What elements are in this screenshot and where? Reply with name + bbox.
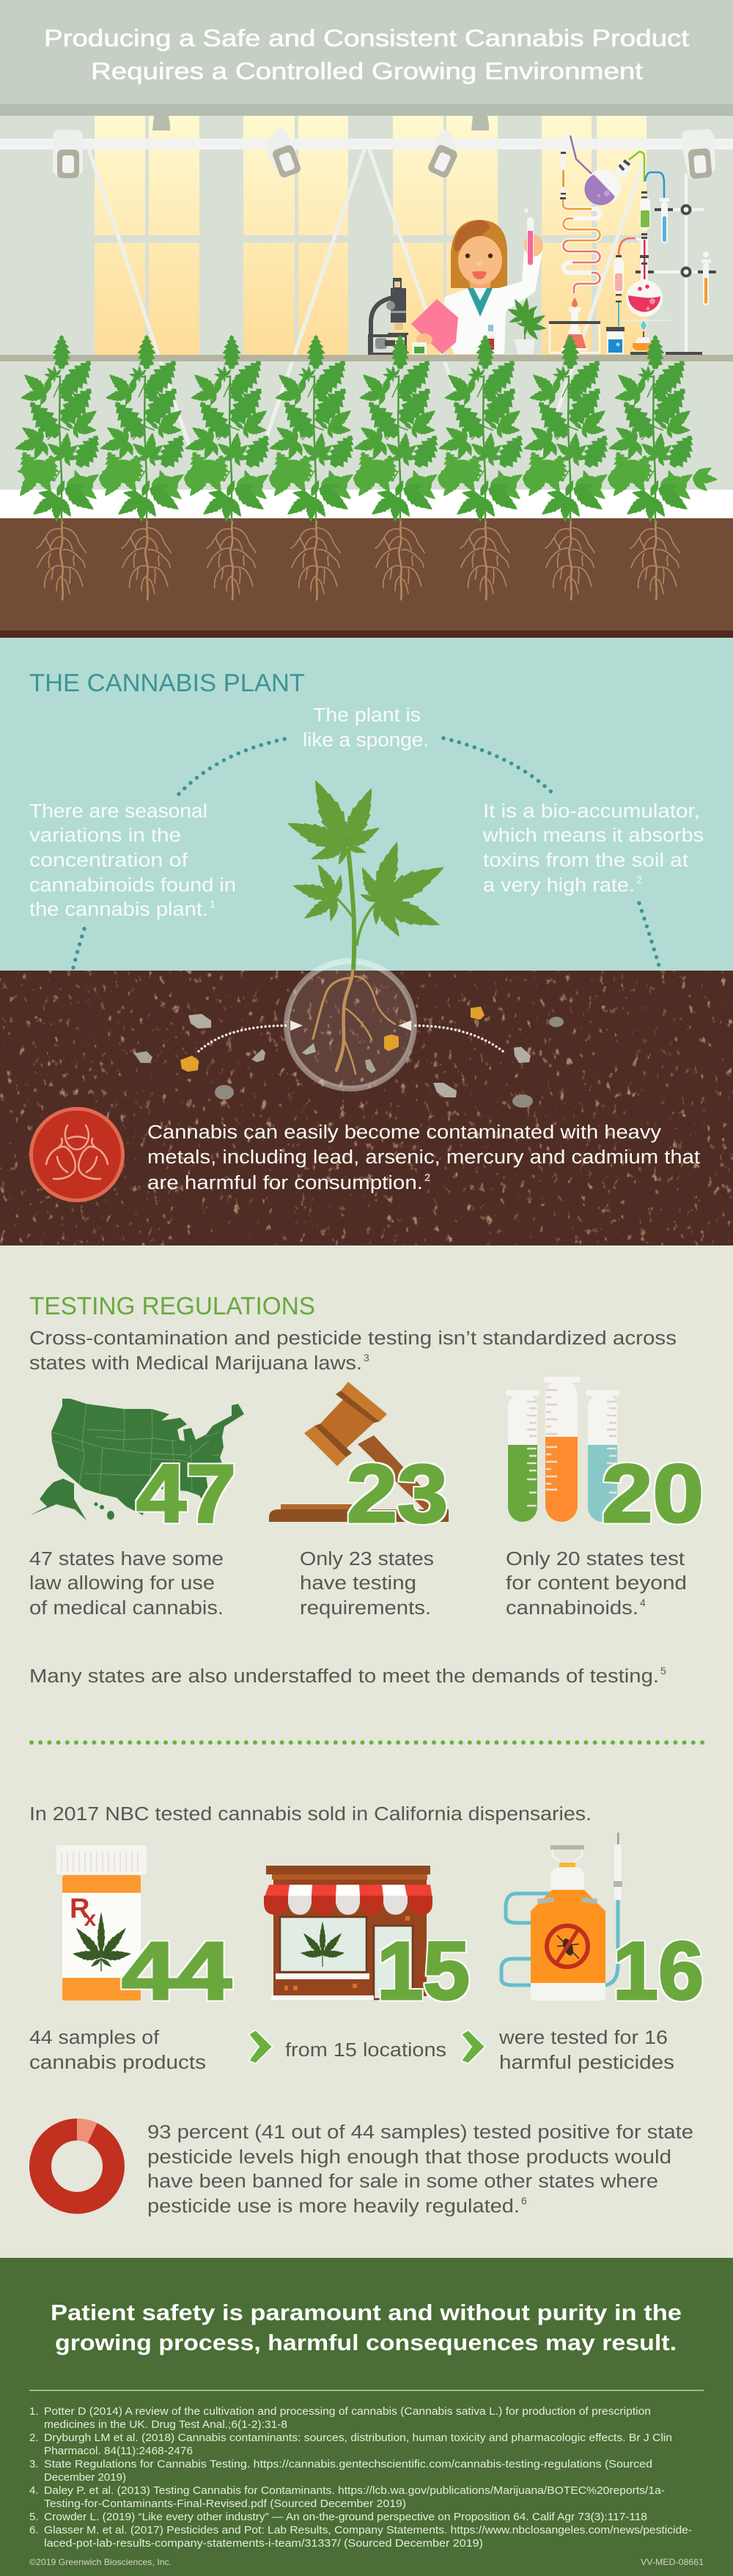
green beaker bbox=[412, 342, 427, 354]
potted seedling bbox=[500, 290, 554, 354]
references: Potter D (2014) A review of the cultivation and processing of cannabis (Cannabis sativa L.) for production of prescription bbox=[44, 2405, 651, 2418]
text: 93 percent: pesticide use is more heavily regulated. bbox=[147, 2196, 520, 2217]
intro text bbox=[29, 1328, 677, 1374]
u tube and purple flask bbox=[560, 136, 644, 205]
references: 4. bbox=[29, 2484, 39, 2497]
document code: VV-MED-08661 bbox=[641, 2557, 704, 2567]
panel: conclusion and references bbox=[0, 2258, 733, 2576]
scientist bbox=[411, 208, 544, 354]
orange tube bbox=[701, 251, 711, 306]
small bottle bbox=[486, 325, 496, 354]
references: 2. bbox=[29, 2432, 39, 2444]
icon: prescription bottle: x bbox=[84, 1907, 96, 1931]
caption: 44 samples: 44 samples of bbox=[29, 2028, 160, 2048]
callout: heavy metals: Cannabis can easily become contaminated with heavy bbox=[147, 1122, 661, 1143]
row of cannabis plants bbox=[13, 335, 718, 522]
references: December 2019) bbox=[44, 2471, 126, 2484]
icon: prescription bottle: R bbox=[70, 1894, 89, 1924]
blue jar bbox=[606, 302, 625, 354]
callout: heavy metals: 2 bbox=[424, 1171, 430, 1183]
arrow: chevron two bbox=[461, 2030, 485, 2064]
icon: pesticide sprayer bbox=[501, 1833, 622, 2001]
text: sponge: The plant is bbox=[313, 705, 421, 726]
caption: 23 states bbox=[300, 1549, 434, 1619]
text: sponge bbox=[303, 705, 429, 751]
references: 3. bbox=[29, 2458, 39, 2470]
references: laced-pot-lab-results-company-statements-i-team/31337/ (Sourced December 2019) bbox=[44, 2537, 483, 2550]
conclusion: growing process, harmful consequences may result. bbox=[55, 2330, 677, 2355]
number: 47: 47 bbox=[136, 1448, 236, 1539]
references: 6. bbox=[29, 2524, 39, 2536]
caption: 20 states: 4 bbox=[640, 1597, 646, 1608]
caption: 16 pesticides: harmful pesticides bbox=[499, 2053, 674, 2073]
text: seasonal variations: cannabinoids found in bbox=[29, 875, 236, 896]
text: seasonal variations: variations in the bbox=[29, 825, 181, 846]
clipboard folder bbox=[411, 299, 458, 354]
pink tube bbox=[614, 238, 643, 302]
number: 44: 44 bbox=[122, 1925, 232, 2017]
text: 93 percent: pesticide levels high enough that those products would bbox=[147, 2147, 671, 2168]
illustration: seedling roots bbox=[313, 971, 395, 1074]
text: bio-accumulator: toxins from the soil at bbox=[483, 850, 688, 871]
icon: dispensary storefront bbox=[264, 1866, 432, 2000]
number: 20: 20 bbox=[602, 1448, 704, 1539]
text: bio-accumulator: It is a bio-accumulator, bbox=[483, 801, 700, 822]
panel: contaminated soil bbox=[0, 971, 733, 1245]
text: 93 percent: 6 bbox=[521, 2195, 527, 2207]
caption: 47 states: of medical cannabis. bbox=[29, 1598, 224, 1619]
caption: 23 states: Only 23 states bbox=[300, 1549, 434, 1569]
caption: 20 states: Only 20 states test bbox=[506, 1549, 685, 1569]
blue tube bbox=[645, 172, 669, 243]
lab apparatus bbox=[549, 136, 716, 355]
icon: prescription bottle bbox=[56, 1845, 147, 2001]
references: Daley P. et al. (2013) Testing Cannabis for Contaminants. https://lcb.wa.gov/publications/Marijuana/BOTEC%20reports/1a- bbox=[44, 2484, 665, 2497]
text: seasonal variations: the cannabis plant. bbox=[29, 899, 208, 920]
conclusion: Patient safety is paramount and without purity in the bbox=[51, 2300, 682, 2325]
caption: 47 states: law allowing for use bbox=[29, 1573, 215, 1594]
title: Producing a Safe and Consistent Cannabis Product bbox=[44, 25, 689, 51]
references: Testing-for-Contaminants-Final-Revised.pdf (Sourced December 2019) bbox=[44, 2498, 406, 2510]
heading: THE CANNABIS PLANT bbox=[29, 669, 305, 697]
text: 93 percent: 93 percent (41 out of 44 samples) tested positive for state bbox=[147, 2122, 693, 2143]
text: nbc test intro: In 2017 NBC tested cannabis sold in California dispensaries. bbox=[29, 1804, 592, 1825]
text: bio-accumulator: which means it absorbs bbox=[482, 825, 704, 846]
number: 15: 15 bbox=[377, 1925, 470, 2017]
caption: 16 pesticides bbox=[498, 2028, 674, 2073]
callout: heavy metals: metals, including lead, arsenic, mercury and cadmium that bbox=[147, 1147, 700, 1168]
text: understaffed: Many states are also understaffed to meet the demands of testing. bbox=[29, 1666, 659, 1687]
ceiling hangers bbox=[152, 104, 489, 130]
white planter band bbox=[0, 490, 733, 518]
contaminant rocks bbox=[134, 1007, 564, 1108]
text: seasonal variations: 1 bbox=[210, 898, 216, 910]
caption: 20 states: for content beyond bbox=[506, 1573, 687, 1594]
test tube bbox=[524, 208, 534, 266]
caption: 20 states bbox=[506, 1549, 687, 1619]
text: bio-accumulator: 2 bbox=[636, 874, 642, 886]
title bbox=[44, 25, 689, 84]
hand bbox=[524, 235, 543, 257]
text: seasonal variations: concentration of bbox=[29, 850, 188, 871]
support stand bbox=[621, 174, 716, 355]
conclusion bbox=[51, 2300, 682, 2355]
references: State Regulations for Cannabis Testing. https://cannabis.gentechscientific.com/cannabis-testing-regulations (Sourced bbox=[44, 2458, 652, 2470]
text: 93 percent bbox=[147, 2122, 693, 2217]
text: bio-accumulator: a very high rate. bbox=[483, 875, 635, 896]
title: Requires a Controlled Growing Environment bbox=[91, 58, 643, 84]
icon: test tubes bbox=[506, 1377, 619, 1522]
caption: 44 samples: cannabis products bbox=[29, 2053, 206, 2073]
number: 23: 23 bbox=[347, 1448, 448, 1539]
panel: testing regulations bbox=[0, 1245, 733, 2258]
callout: heavy metals bbox=[147, 1122, 700, 1193]
greenhouse room background bbox=[0, 116, 733, 490]
references: medicines in the UK. Drug Test Anal.;6(1-2):31-8 bbox=[44, 2418, 287, 2431]
light pipe bbox=[0, 139, 733, 150]
callout: heavy metals: are harmful for consumption. bbox=[147, 1173, 423, 1193]
grow lamps bbox=[53, 128, 715, 180]
references: 1. bbox=[29, 2405, 39, 2418]
root magnifier circle bbox=[287, 961, 414, 1089]
alcohol burner bbox=[633, 320, 652, 350]
chart: 93 percent donut bbox=[40, 2119, 114, 2203]
caption: 23 states: have testing bbox=[300, 1573, 416, 1594]
heading: testing regulations: TESTING REGULATIONS bbox=[29, 1292, 315, 1320]
shelf bbox=[0, 355, 733, 361]
icon: biohazard badge bbox=[31, 1108, 123, 1201]
dotted arcs bbox=[73, 738, 660, 971]
arrow: chevron one bbox=[248, 2030, 273, 2064]
erlenmeyer flask on burner bbox=[549, 298, 600, 353]
copyright: ©2019 Greenwich Biosciences, Inc. bbox=[29, 2557, 172, 2567]
red round flask bbox=[626, 233, 663, 317]
text: sponge: like a sponge. bbox=[303, 730, 429, 751]
text: seasonal variations: There are seasonal bbox=[29, 801, 207, 822]
icon: us map bbox=[30, 1399, 244, 1520]
soil bed bbox=[0, 518, 733, 638]
caption: 47 states: 47 states have some bbox=[29, 1549, 224, 1569]
caption: 23 states: requirements. bbox=[300, 1598, 431, 1619]
text: seasonal variations bbox=[29, 801, 236, 920]
collar bbox=[468, 288, 493, 317]
illustration: cannabis seedling bbox=[284, 775, 450, 971]
panel: the cannabis plant bbox=[0, 638, 733, 971]
caption: 16 pesticides: were tested for 16 bbox=[498, 2028, 668, 2048]
intro text: 3 bbox=[364, 1352, 369, 1364]
serpentine condenser bbox=[563, 199, 600, 293]
microscope bbox=[369, 278, 408, 354]
references: Pharmacol. 84(11):2468-2476 bbox=[44, 2445, 193, 2457]
lab coat bbox=[440, 243, 544, 354]
hanging cords bbox=[89, 150, 643, 455]
absorption arrows bbox=[199, 1020, 503, 1051]
number: 16: 16 bbox=[613, 1925, 704, 2017]
text: understaffed: 5 bbox=[660, 1665, 666, 1677]
caption: 20 states: cannabinoids. bbox=[506, 1598, 638, 1619]
intro text: states with Medical Marijuana laws. bbox=[29, 1353, 362, 1374]
icon: gavel bbox=[269, 1382, 449, 1522]
text: bio-accumulator bbox=[482, 801, 704, 896]
references: Dryburgh LM et al. (2018) Cannabis contaminants: sources, distribution, human toxicity and pharmacologic effects. Br J Clin bbox=[44, 2432, 672, 2444]
text: 93 percent: have been banned for sale in some other states where bbox=[147, 2171, 658, 2192]
caption: 47 states bbox=[29, 1549, 224, 1619]
intro text: Cross-contamination and pesticide testing isn’t standardized across bbox=[29, 1328, 677, 1349]
references bbox=[29, 2405, 692, 2550]
references: Crowder L. (2019) “Like every other industry” — An on-the-ground perspective on Proposition 64. Calif Agr 73(3):117-118 bbox=[44, 2511, 647, 2523]
title banner bbox=[0, 0, 733, 116]
face bbox=[458, 236, 502, 295]
references: 5. bbox=[29, 2511, 39, 2523]
references: Glasser M. et al. (2017) Pesticides and Pot: Lab Results, Company Statements. https://www.nbclosangeles.com/news/pesticide- bbox=[44, 2524, 692, 2536]
caption: 44 samples bbox=[29, 2028, 206, 2073]
hair bbox=[451, 220, 507, 288]
green tube bbox=[640, 191, 650, 230]
plant roots bbox=[37, 522, 679, 600]
caption: 15 locations: from 15 locations bbox=[285, 2040, 446, 2061]
